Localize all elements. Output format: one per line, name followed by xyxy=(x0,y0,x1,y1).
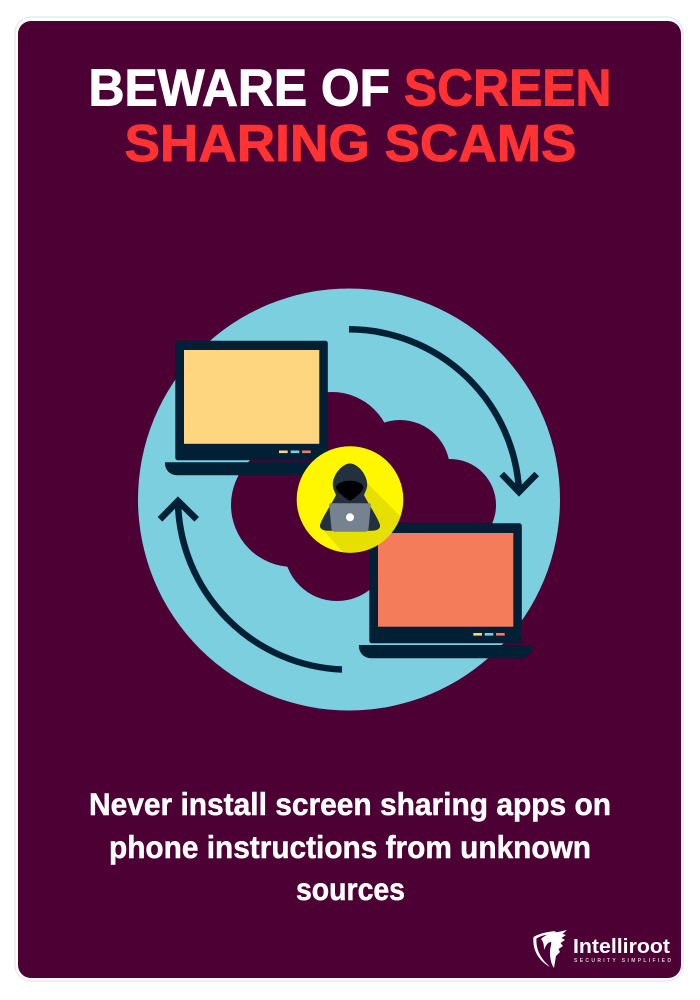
message text: Never install screen sharing apps on xyxy=(89,786,611,822)
title xyxy=(88,60,612,173)
arrow: clockwise top right xyxy=(349,329,537,492)
tagline: SECURITY SIMPLIFIED xyxy=(574,958,671,964)
big teal circle xyxy=(138,288,560,710)
title: SHARING SCAMS xyxy=(124,115,576,173)
title: BEWARE OF SCREEN xyxy=(88,60,612,118)
laptop: yellow screen xyxy=(165,341,338,475)
illustration: screen sharing scam xyxy=(138,288,560,710)
message text: sources xyxy=(296,871,405,907)
wordmark: Intelliroot xyxy=(573,936,670,958)
logo: Intelliroot xyxy=(533,930,671,968)
cloud xyxy=(231,392,496,601)
icon: hacker badge xyxy=(296,446,404,553)
icon: shield with eagle xyxy=(533,930,567,968)
message text: phone instructions from unknown xyxy=(109,829,591,865)
arrow: clockwise bottom left xyxy=(160,501,342,670)
message text xyxy=(89,786,611,907)
laptop: orange screen xyxy=(359,523,532,658)
